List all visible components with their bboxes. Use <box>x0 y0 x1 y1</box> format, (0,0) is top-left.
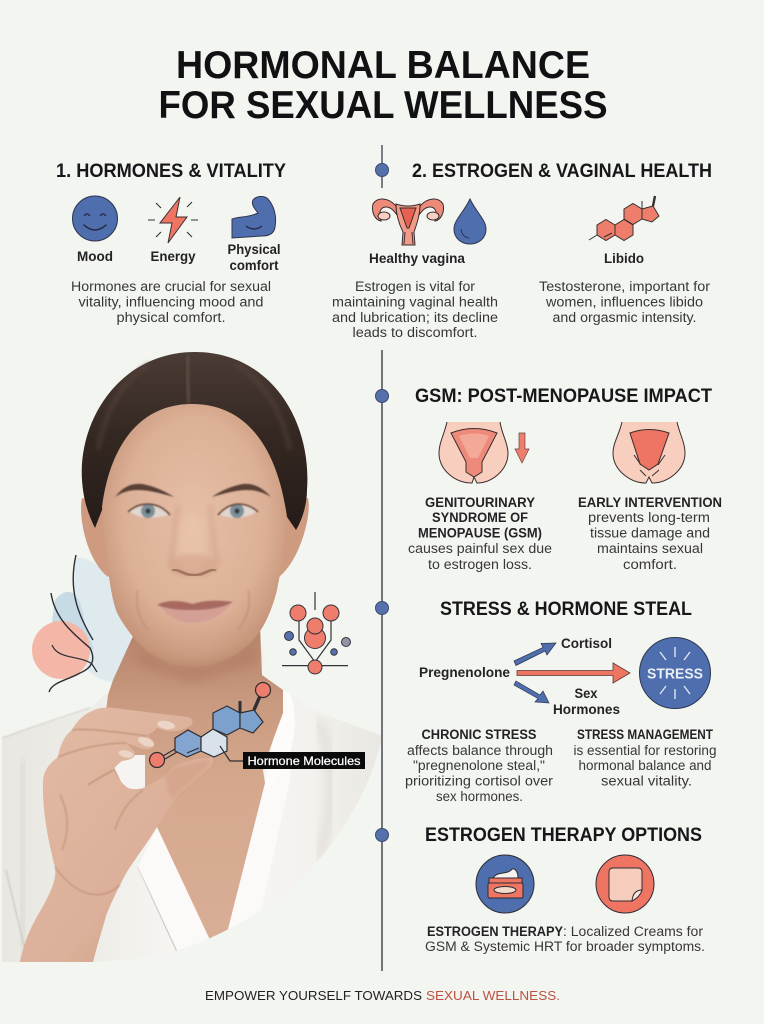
text: estrogen therapy description: : Localized Creams for <box>563 924 704 939</box>
icon: stress circle <box>640 638 710 708</box>
ears <box>81 498 309 577</box>
text: stress management <box>574 727 716 788</box>
icon labels: Energy <box>150 249 196 264</box>
text: testosterone description: and orgasmic intensity. <box>552 310 696 325</box>
flow diagram labels: Sex <box>574 686 598 701</box>
text: estrogen therapy description: GSM & Systemic HRT for broader symptoms. <box>425 939 705 954</box>
icon: flexed muscle <box>232 196 276 238</box>
icon: energy bolt <box>148 197 198 243</box>
text: estrogen description: leads to discomfort. <box>352 325 478 340</box>
heading: GSM: GSM: POST-MENOPAUSE IMPACT <box>415 386 712 407</box>
shirt <box>2 680 382 965</box>
text: chronic stress: "pregnenolone steal," <box>413 758 545 773</box>
icon labels: Libido <box>604 251 644 266</box>
icon labels <box>369 251 644 266</box>
text: chronic stress: sex hormones. <box>436 789 523 804</box>
text: testosterone description: women, influences libido <box>545 294 703 310</box>
title: HORMONAL BALANCE <box>176 44 590 87</box>
text: early intervention: EARLY INTERVENTION <box>578 495 722 510</box>
flow diagram labels: Pregnenolone <box>419 665 510 680</box>
hair <box>82 352 307 530</box>
timeline: vertical line and dots <box>376 145 388 971</box>
text: estrogen description: Estrogen is vital for <box>355 279 476 294</box>
text: stress management: is essential for restoring <box>574 743 716 758</box>
text: genitourinary syndrome: MENOPAUSE (GSM) <box>418 526 542 540</box>
heading: estrogen and vaginal health: 2. ESTROGEN & VAGINAL HEALTH <box>412 161 712 182</box>
text: early intervention: prevents long-term <box>588 510 710 525</box>
heading: stress and hormone steal: STRESS & HORMONE STEAL <box>440 599 692 620</box>
text: testosterone description <box>539 279 711 325</box>
hand <box>20 708 213 962</box>
text: testosterone description: Testosterone, important for <box>539 279 711 294</box>
title: FOR SEXUAL WELLNESS <box>158 84 608 127</box>
label: hormone molecules: Hormone Molecules <box>248 754 360 768</box>
text: early intervention: tissue damage and <box>590 526 710 540</box>
arrow: pregnenolone to stress <box>517 663 630 683</box>
text: chronic stress: affects balance through <box>407 743 553 758</box>
face <box>102 404 287 667</box>
icon: uterus <box>372 199 444 245</box>
text: hormones description: vitality, influencing mood and <box>78 294 264 310</box>
text: chronic stress: CHRONIC STRESS <box>422 727 536 742</box>
panel: stress and hormone steal <box>405 599 716 804</box>
flow diagram labels: Hormones <box>553 702 620 717</box>
chest and neck skin <box>100 626 283 940</box>
text: hormones description <box>71 279 271 325</box>
text: hormones description: physical comfort. <box>116 310 226 325</box>
text: stress management: sexual vitality. <box>601 774 692 788</box>
shirt visible between fingers <box>113 755 145 790</box>
text: early intervention: maintains sexual <box>597 541 703 556</box>
icon labels: Healthy vagina <box>369 251 465 266</box>
icon: stress circle: STRESS <box>647 666 703 682</box>
text: estrogen description: maintaining vaginal health <box>332 294 498 310</box>
text: genitourinary syndrome: GENITOURINARY <box>425 495 535 510</box>
icon: healthy pelvis <box>613 422 685 483</box>
icon: down arrow <box>515 433 529 463</box>
face details <box>115 484 271 684</box>
panel: estrogen and vaginal health <box>332 161 712 340</box>
heading: estrogen therapy options: ESTROGEN THERAPY OPTIONS <box>425 825 702 846</box>
footer tagline: EMPOWER YOURSELF TOWARDS <box>205 988 422 1003</box>
icon: mood face <box>72 196 118 241</box>
panel: estrogen therapy options <box>425 825 705 954</box>
text: estrogen therapy description: ESTROGEN THERAPY <box>427 924 563 939</box>
panel: GSM post-menopause impact <box>408 386 722 572</box>
heading: hormones and vitality: 1. HORMONES & VITALITY <box>56 161 286 182</box>
arrow: pregnenolone to cortisol <box>514 643 556 666</box>
title <box>158 44 608 127</box>
text: genitourinary syndrome: SYNDROME OF <box>432 510 528 525</box>
text: early intervention: comfort. <box>623 557 677 572</box>
icon: steroid molecule <box>589 196 659 240</box>
arrow: pregnenolone to sex hormones <box>514 681 549 703</box>
footer tagline <box>205 988 560 1003</box>
text: estrogen description: and lubrication; its decline <box>332 310 498 325</box>
panel: hormones and vitality <box>56 161 286 325</box>
icon labels: comfort <box>230 258 279 273</box>
text: genitourinary syndrome <box>408 495 552 572</box>
icon labels: Physical <box>228 242 280 257</box>
flow diagram labels: Cortisol <box>561 636 612 651</box>
text: stress management: STRESS MANAGEMENT <box>577 727 714 742</box>
icon: cream jar <box>476 855 534 913</box>
footer tagline: SEXUAL WELLNESS. <box>426 988 560 1003</box>
text: chronic stress <box>405 727 554 804</box>
text: stress management: hormonal balance and <box>578 758 712 773</box>
decorative blobs and curves <box>32 555 132 692</box>
text: chronic stress: prioritizing cortisol over <box>405 774 554 788</box>
photo: woman holding hormone molecule <box>2 352 382 965</box>
icon: pelvis with decline <box>439 422 508 483</box>
icon labels <box>77 242 280 273</box>
icon: floating molecule diagram <box>282 592 350 674</box>
flow diagram labels <box>419 636 620 717</box>
icon: water drop <box>454 199 486 244</box>
text: estrogen description <box>332 279 498 340</box>
text: hormones description: Hormones are crucial for sexual <box>71 279 271 294</box>
text: estrogen therapy description <box>425 924 705 954</box>
icon: hormone patch <box>596 855 654 913</box>
text: early intervention <box>578 495 722 572</box>
icon: hormone molecule held in hand <box>150 682 270 768</box>
text: genitourinary syndrome: to estrogen loss. <box>428 557 532 572</box>
text: genitourinary syndrome: causes painful sex due <box>408 541 552 556</box>
icon labels: Mood <box>77 249 113 264</box>
